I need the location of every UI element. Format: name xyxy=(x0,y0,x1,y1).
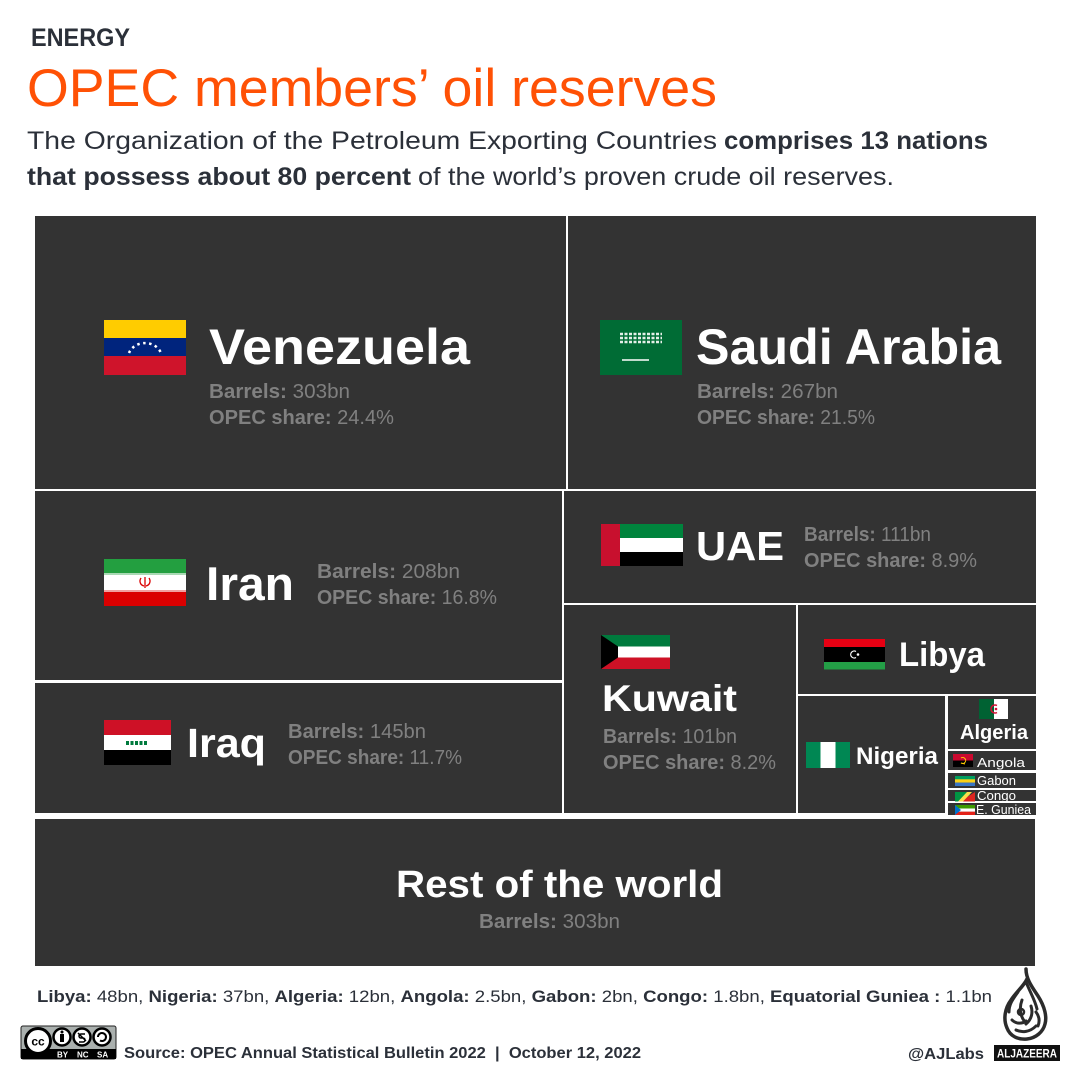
stats: UAE: OPEC share: 8.9% xyxy=(804,550,977,572)
name: Equatorial Guinea: E. Guniea xyxy=(976,802,1032,817)
flag: UAE xyxy=(601,524,683,566)
icon: creative commons licence badge: SA xyxy=(97,1050,108,1060)
icon: creative commons licence badge: cc xyxy=(31,1034,45,1048)
flag: Gabon xyxy=(955,776,975,786)
icon: creative commons licence badge: NC xyxy=(77,1050,89,1060)
intro text: that possess about 80 percent xyxy=(27,163,412,191)
flag: Iraq xyxy=(104,720,171,765)
name: Algeria: Algeria xyxy=(960,722,1029,744)
flag: Libya xyxy=(824,639,885,670)
stats: Rest of the world: Barrels: 303bn xyxy=(479,911,620,933)
panel: Equatorial Guinea xyxy=(948,802,1036,817)
stats: Kuwait: OPEC share: 8.2% xyxy=(603,752,776,774)
stats: Iraq: Barrels: 145bn xyxy=(288,721,426,743)
panel: Kuwait xyxy=(564,605,796,813)
stats: Venezuela: OPEC share: 24.4% xyxy=(209,407,394,429)
flag: Saudi Arabia xyxy=(600,320,682,375)
panel: Venezuela xyxy=(35,216,566,489)
panel: Iraq xyxy=(35,683,562,813)
name: Rest of the world: Rest of the world xyxy=(396,864,723,906)
kicker: ENERGY: ENERGY xyxy=(31,24,130,52)
name: Nigeria: Nigeria xyxy=(856,743,939,770)
intro text xyxy=(27,127,988,191)
stats: Iran: Barrels: 208bn xyxy=(317,561,460,583)
stats: Venezuela: Barrels: 303bn xyxy=(209,381,350,403)
footnote: smaller producers: Libya: 48bn, Nigeria: 37bn, Algeria: 12bn, Angola: 2.5bn, Gabon: 2bn, Congo: 1.8bn, Equatorial Guniea : 1.1bn xyxy=(37,987,992,1006)
name: Venezuela: Venezuela xyxy=(209,319,471,375)
stats: Iran: OPEC share: 16.8% xyxy=(317,587,497,609)
flag: Algeria xyxy=(979,699,1008,719)
flag: Iran xyxy=(104,559,186,606)
title: OPEC members’ oil reserves xyxy=(27,59,717,118)
name: Congo: Congo xyxy=(977,788,1016,803)
stats: Kuwait xyxy=(603,726,776,774)
panel: Iran xyxy=(35,491,562,680)
stats: Saudi Arabia: Barrels: 267bn xyxy=(697,381,838,403)
stats: Venezuela xyxy=(209,381,394,429)
name: Libya: Libya xyxy=(899,636,986,674)
name: Iraq: Iraq xyxy=(187,720,266,766)
flag: Congo xyxy=(955,792,975,802)
stats: UAE: Barrels: 111bn xyxy=(804,524,931,546)
stats: UAE xyxy=(804,524,977,572)
icon: creative commons licence badge: BY xyxy=(57,1050,69,1060)
name: Kuwait: Kuwait xyxy=(602,678,737,719)
intro text: The Organization of the Petroleum Exporting Countries xyxy=(27,127,717,155)
credit: AJLabs: @AJLabs xyxy=(908,1046,984,1063)
flag: Kuwait xyxy=(601,635,670,669)
panel: Congo xyxy=(948,788,1036,803)
name: UAE: UAE xyxy=(696,523,784,569)
stats: Kuwait: Barrels: 101bn xyxy=(603,726,737,748)
intro text: comprises 13 nations xyxy=(724,127,988,155)
stats: Saudi Arabia: OPEC share: 21.5% xyxy=(697,407,875,429)
source line: Source: OPEC Annual Statistical Bulletin 2022 | October 12, 2022 xyxy=(124,1045,641,1062)
flag: Venezuela xyxy=(104,320,186,375)
panel: Algeria xyxy=(948,696,1036,749)
logo: Al Jazeera wordmark: ALJAZEERA xyxy=(997,1046,1057,1060)
panel: Gabon xyxy=(948,773,1036,788)
name: Saudi Arabia: Saudi Arabia xyxy=(696,319,1002,375)
flag: Equatorial Guinea xyxy=(955,805,975,815)
panel: Saudi Arabia xyxy=(568,216,1036,489)
panel: Angola xyxy=(948,751,1036,770)
panel: Libya xyxy=(798,605,1036,694)
panel: Rest of the world xyxy=(35,819,1035,966)
stats: Iraq xyxy=(288,721,462,769)
flag: Nigeria xyxy=(806,742,850,768)
name: Iran: Iran xyxy=(206,557,294,610)
panel: UAE xyxy=(564,491,1036,603)
intro text: of the world’s proven crude oil reserves. xyxy=(418,163,894,191)
icon: creative commons licence badge xyxy=(21,1026,116,1060)
stats: Iran xyxy=(317,561,497,609)
flag: Angola xyxy=(953,754,973,767)
name: Gabon: Gabon xyxy=(977,773,1016,788)
stats: Iraq: OPEC share: 11.7% xyxy=(288,747,462,769)
stats: Saudi Arabia xyxy=(697,381,875,429)
panel: Nigeria xyxy=(798,696,945,813)
logo: Al Jazeera calligraphic mark xyxy=(1005,969,1046,1039)
name: Angola: Angola xyxy=(977,755,1026,770)
